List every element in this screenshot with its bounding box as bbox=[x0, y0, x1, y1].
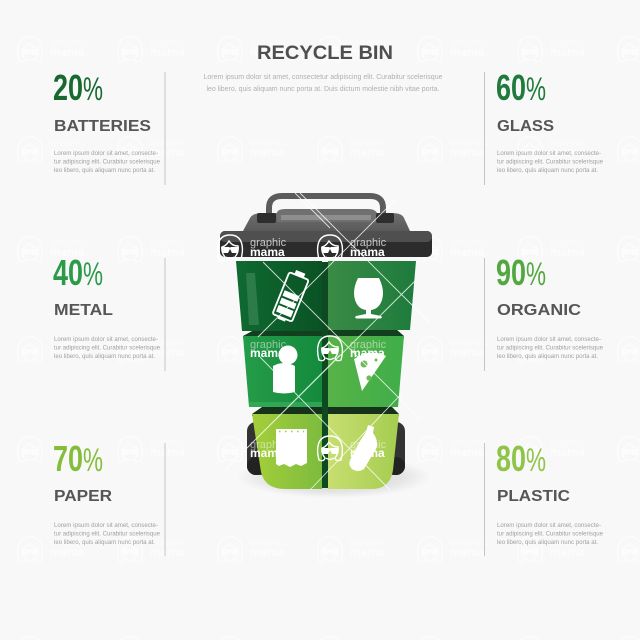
centre gap bbox=[322, 262, 328, 488]
bin panel: batteries bbox=[236, 261, 322, 331]
panel: plastic: tur adipiscing elit. Curabitur scelerisque bbox=[497, 530, 603, 538]
panel: batteries bbox=[53, 67, 166, 185]
watermark on lid and panels: graphic bbox=[350, 339, 387, 351]
intro text: Lorem ipsum dolor sit amet, consectetur adipiscing elit. Curabitur scelerisque bbox=[204, 72, 442, 81]
intro text bbox=[204, 72, 442, 93]
panel: organic: tur adipiscing elit. Curabitur scelerisque bbox=[497, 344, 603, 352]
row tops bbox=[243, 329, 404, 338]
watermark on lid and panels bbox=[218, 235, 387, 461]
panel: plastic: % bbox=[526, 442, 546, 478]
watermark on lid and panels: mama bbox=[250, 346, 285, 360]
bin panel: organic bbox=[328, 336, 404, 407]
panel: metal: % bbox=[83, 256, 103, 292]
panel: paper: 70 bbox=[53, 438, 83, 479]
lid handle bbox=[269, 196, 383, 216]
panel: metal: tur adipiscing elit. Curabitur scelerisque bbox=[54, 344, 160, 352]
lid bbox=[220, 209, 432, 257]
panel: organic: ORGANIC bbox=[497, 302, 581, 319]
panel: batteries: 20 bbox=[53, 67, 83, 108]
icon: battery bbox=[272, 268, 310, 324]
panel: organic: leo libero, quis aliquam nunc porta at. bbox=[497, 353, 598, 360]
panel: organic: 90 bbox=[496, 252, 526, 293]
panel: organic: Lorem ipsum dolor sit amet, consecte- bbox=[497, 336, 601, 343]
panel: metal: 40 bbox=[53, 252, 83, 293]
wheels bbox=[247, 422, 405, 475]
panel: plastic: leo libero, quis aliquam nunc porta at. bbox=[497, 539, 598, 546]
panel: plastic: 80 bbox=[496, 438, 526, 479]
panel: glass: 60 bbox=[496, 67, 526, 108]
bin panel: glass bbox=[328, 261, 416, 330]
bin panel: metal bbox=[243, 336, 322, 407]
panel: paper: leo libero, quis aliquam nunc porta at. bbox=[54, 539, 155, 546]
panel: plastic: PLASTIC bbox=[497, 488, 570, 505]
panel: organic: % bbox=[526, 256, 546, 292]
panel: metal: METAL bbox=[54, 302, 113, 319]
panel: metal: leo libero, quis aliquam nunc porta at. bbox=[54, 353, 155, 360]
floor shadow bbox=[237, 456, 431, 498]
panel: batteries: tur adipiscing elit. Curabitur scelerisque bbox=[54, 158, 160, 166]
panel: plastic bbox=[484, 438, 603, 556]
panel: glass: leo libero, quis aliquam nunc porta at. bbox=[497, 167, 598, 174]
panel: batteries: Lorem ipsum dolor sit amet, consecte- bbox=[54, 150, 158, 157]
title: RECYCLE BIN bbox=[257, 43, 393, 64]
bin panel: plastic bbox=[328, 414, 399, 489]
panel: batteries: % bbox=[83, 71, 103, 107]
watermark on lid and panels: graphic bbox=[250, 339, 287, 351]
panel: glass: tur adipiscing elit. Curabitur scelerisque bbox=[497, 158, 603, 166]
icon: paper bbox=[276, 429, 307, 467]
watermark on lid and panels: graphic bbox=[350, 439, 387, 451]
icon: can bbox=[273, 346, 298, 394]
intro text: leo libero, quis aliquam nunc porta at. Duis dictum molestie nibh vitae porta. bbox=[206, 84, 440, 93]
panel: metal bbox=[53, 252, 166, 371]
panel: paper: % bbox=[83, 442, 103, 478]
watermark on lid and panels: mama bbox=[250, 245, 285, 259]
panel: glass: Lorem ipsum dolor sit amet, consecte- bbox=[497, 150, 601, 157]
bin panel: paper bbox=[252, 414, 322, 489]
recycle bin illustration bbox=[218, 193, 432, 498]
panel: metal: Lorem ipsum dolor sit amet, consecte- bbox=[54, 336, 158, 343]
icon: wine glass bbox=[354, 278, 383, 318]
panel: batteries: leo libero, quis aliquam nunc porta at. bbox=[54, 167, 155, 174]
panel: glass: GLASS bbox=[497, 118, 554, 135]
diagonal watermark lines bbox=[225, 193, 430, 490]
watermark on lid and panels: mama bbox=[350, 446, 385, 460]
icon: pizza slice bbox=[354, 353, 386, 391]
panel: paper: PAPER bbox=[54, 488, 112, 505]
icon: bottle bbox=[349, 425, 377, 471]
panel: organic bbox=[484, 252, 603, 371]
panel: paper: Lorem ipsum dolor sit amet, consecte- bbox=[54, 522, 158, 529]
watermark on lid and panels: mama bbox=[350, 346, 385, 360]
panel: paper: tur adipiscing elit. Curabitur scelerisque bbox=[54, 530, 160, 538]
watermark on lid and panels: graphic bbox=[250, 237, 287, 249]
panel: plastic: Lorem ipsum dolor sit amet, consecte- bbox=[497, 522, 601, 529]
watermark on lid and panels: mama bbox=[250, 446, 285, 460]
watermark on lid and panels: graphic bbox=[250, 439, 287, 451]
panel: glass: % bbox=[526, 71, 546, 107]
watermark on lid and panels: graphic bbox=[350, 237, 387, 249]
panel: paper bbox=[53, 438, 166, 556]
watermark on lid and panels: mama bbox=[350, 245, 385, 259]
panel: glass bbox=[484, 67, 603, 185]
panel: batteries: BATTERIES bbox=[54, 118, 151, 135]
